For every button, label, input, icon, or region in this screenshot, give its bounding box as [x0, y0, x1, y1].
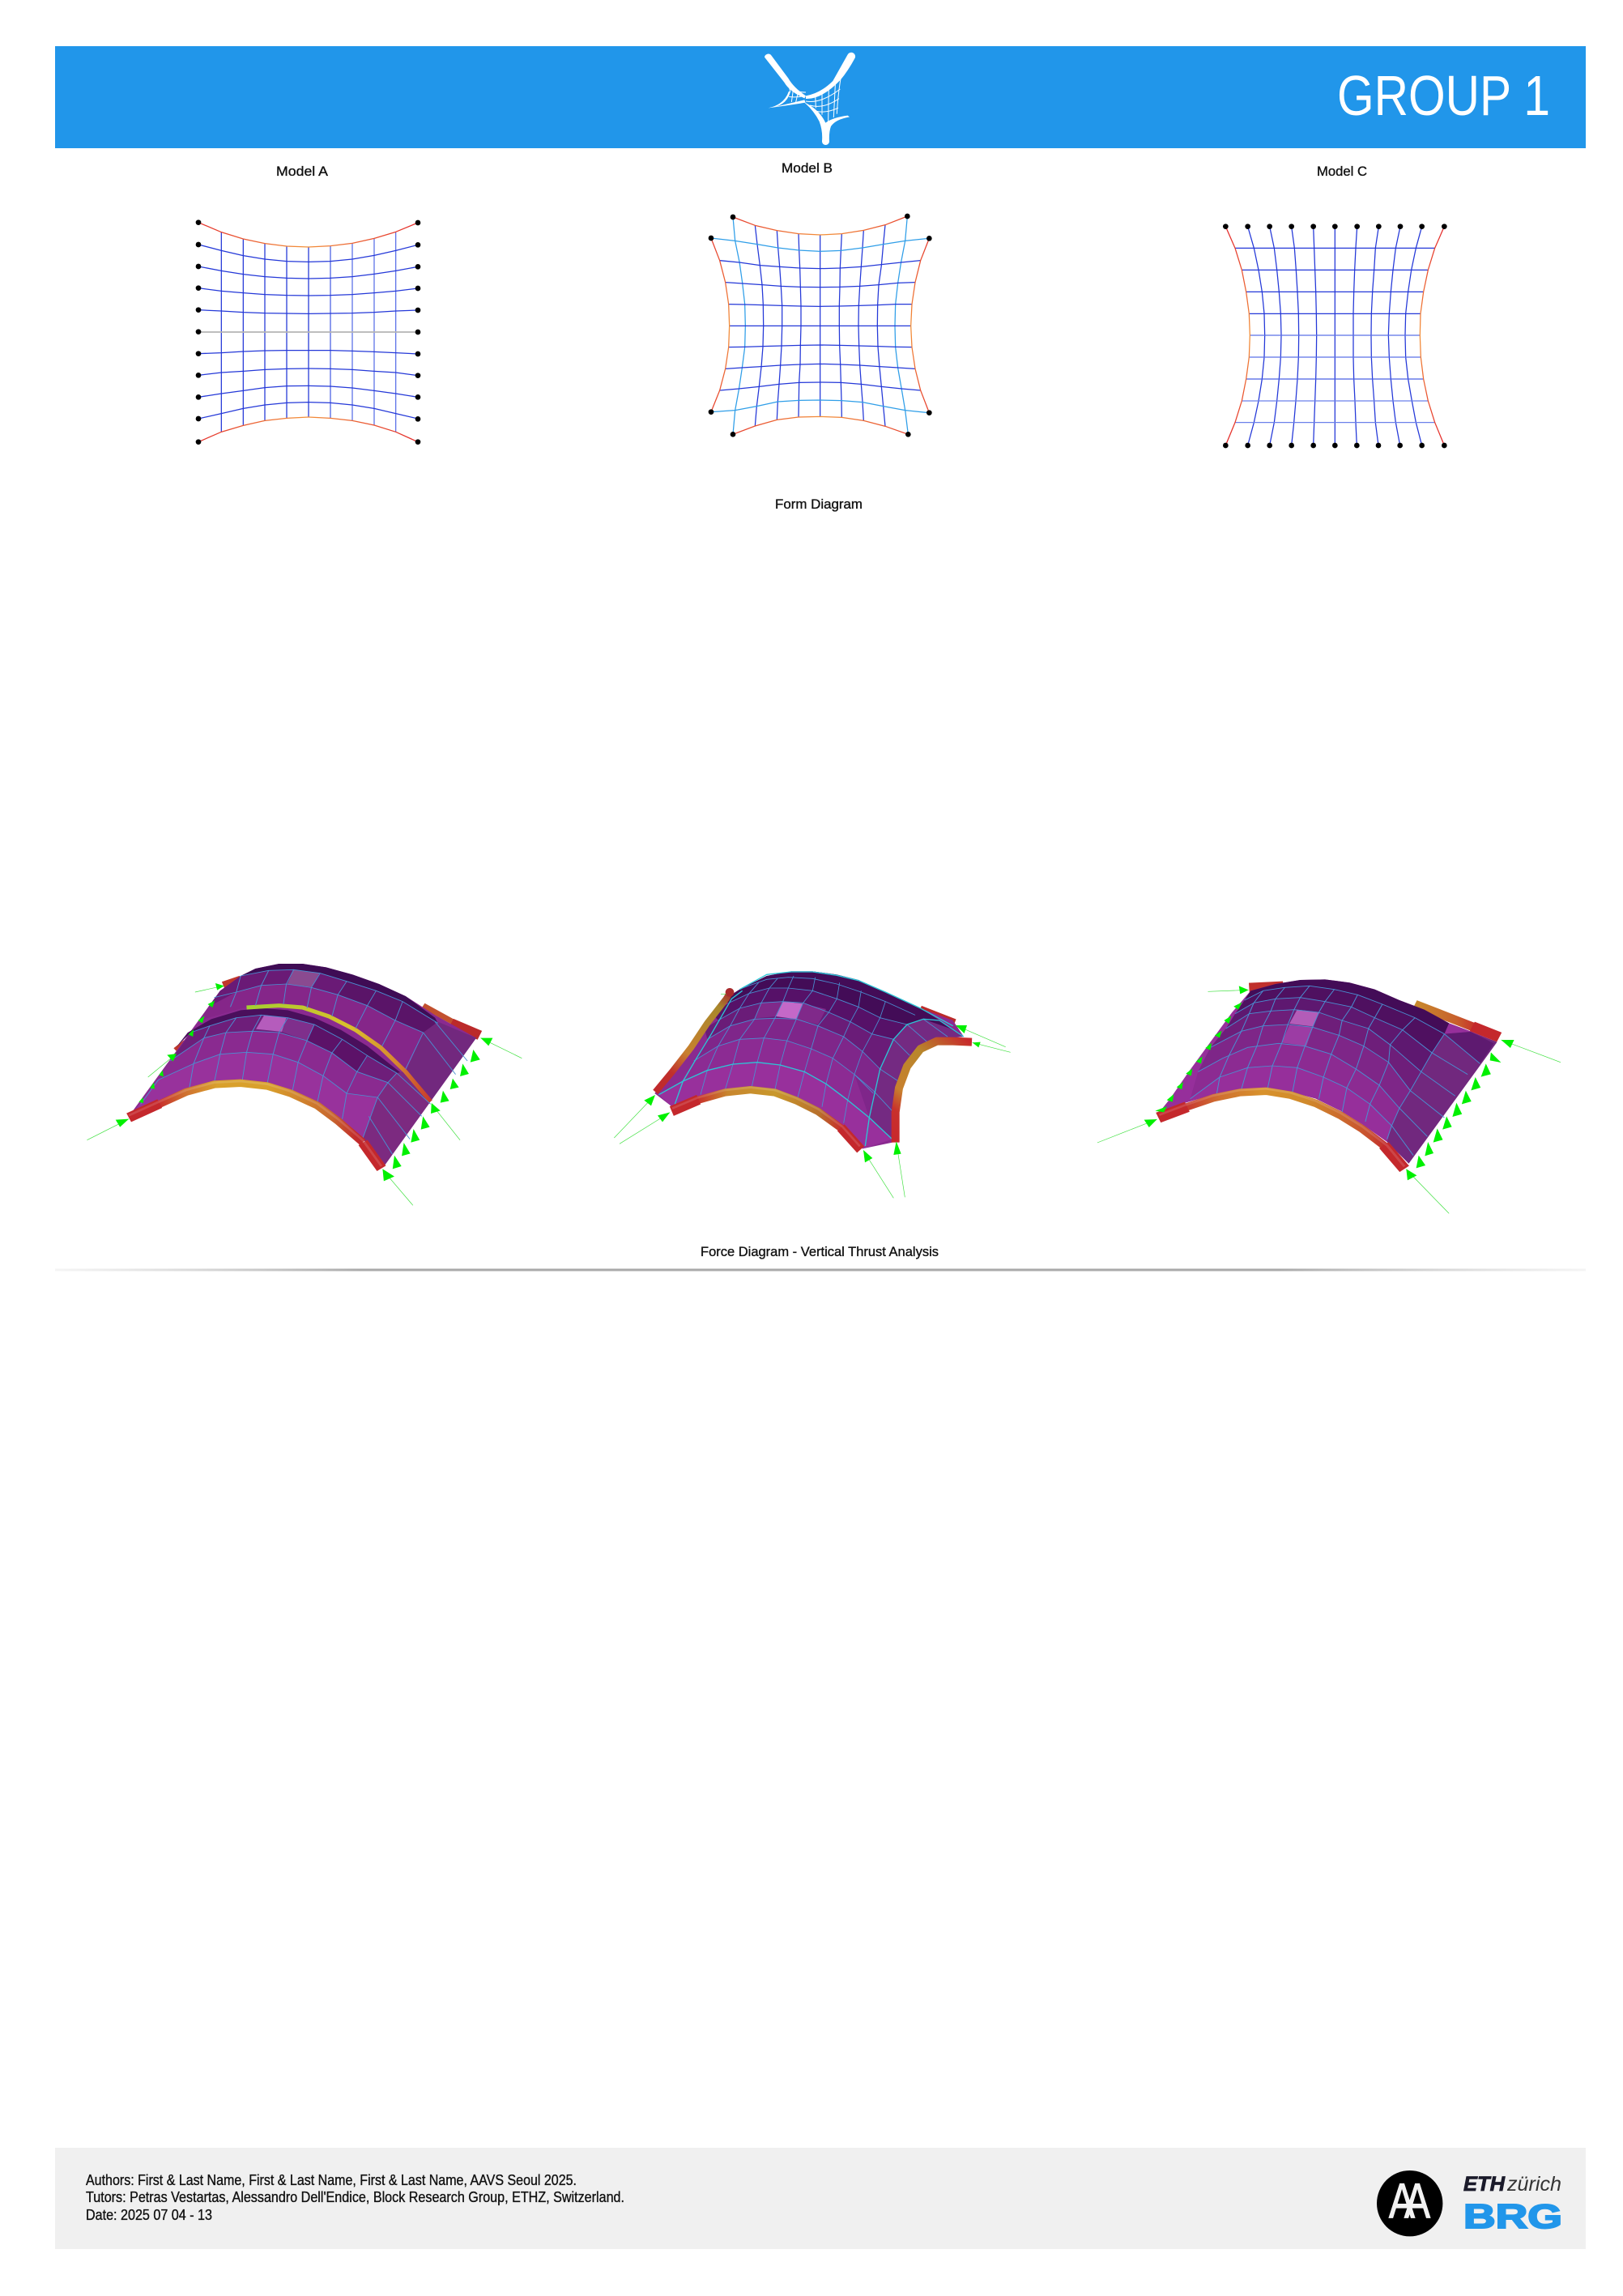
logo: ETH zürich: ETH: [1463, 2173, 1506, 2196]
shell surface: [654, 971, 964, 1148]
force diagram: Model B shell: [614, 971, 1011, 1198]
header title: GROUP 1: [1337, 64, 1550, 127]
highlight cells: [1289, 1010, 1319, 1026]
tubes: [698, 1090, 842, 1129]
highlight cell: [776, 1002, 803, 1019]
logo: AA circle: A: [1404, 2174, 1430, 2228]
shell surface: [132, 964, 476, 1165]
credits text: [86, 2172, 624, 2223]
force diagram: Model C shell: [1097, 979, 1561, 1213]
rear red tubes: [223, 979, 241, 985]
caption: Form Diagram: Form Diagram: [775, 496, 863, 512]
credits text: Date: 2025 07 04 - 13: [86, 2207, 212, 2223]
credits text: Tutors: Petras Vestartas, Alessandro Dell'Endice, Block Research Group, ETHZ, Switzerland.: [86, 2189, 624, 2205]
form diagram: Model C: [1223, 224, 1447, 448]
front tube: [158, 1083, 363, 1143]
divider: [55, 1268, 1586, 1272]
form diagram: Model A: [196, 219, 420, 445]
header banner: [55, 46, 1586, 148]
front lobe bands: [176, 1008, 401, 1073]
front tube: [1186, 1091, 1387, 1148]
form diagram: Model B: [709, 214, 932, 437]
credits text: Authors: First & Last Name, First & Last Name, First & Last Name, AAVS Seoul 2025.: [86, 2172, 577, 2188]
arrows: [1097, 986, 1561, 1213]
force diagram: Model A shell: [87, 964, 522, 1205]
rear tube: [921, 1008, 955, 1022]
cyan main lines: [658, 1063, 892, 1139]
label: Model A: Model A: [276, 164, 329, 179]
logo: BRG: BRG: [1463, 2197, 1562, 2235]
logo: ETH zürich: zürich: [1506, 2173, 1561, 2196]
shell surface: [1159, 979, 1497, 1164]
middle tube: [246, 1006, 431, 1101]
icon: funicular shell logo: [765, 53, 855, 145]
arrows: [87, 983, 522, 1205]
label: Model B: Model B: [782, 160, 833, 176]
logo: AA circle: A: [1389, 2174, 1415, 2228]
caption: Force Diagram: Force Diagram - Vertical Thrust Analysis: [701, 1244, 939, 1259]
grid lines: [743, 978, 915, 1015]
logo: AA circle: [1377, 2170, 1442, 2236]
grid lines: [241, 969, 438, 1023]
highlight cell: [256, 1015, 287, 1032]
footer panel: [55, 2148, 1586, 2249]
rear tubes: [1249, 986, 1283, 988]
logo: ETH zürich: [1463, 2173, 1561, 2196]
label: Model C: Model C: [1317, 164, 1367, 179]
grid lines: [1245, 986, 1480, 1063]
arrows: [614, 994, 1011, 1198]
